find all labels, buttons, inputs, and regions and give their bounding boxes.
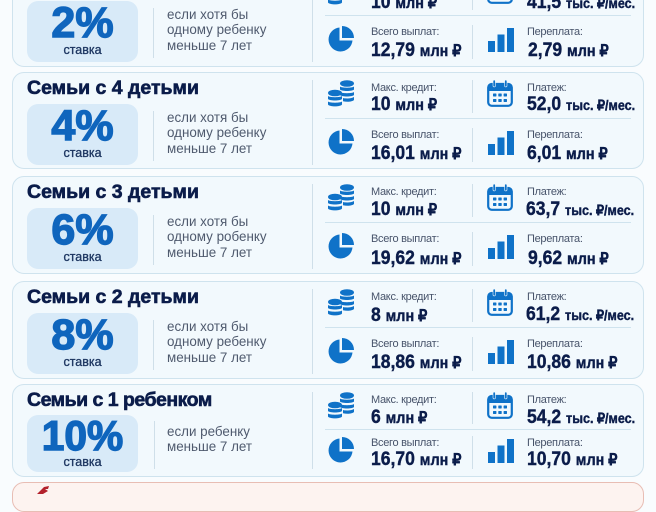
condition text: меньше 7 лет [167,245,252,260]
icon: pie chart [328,437,354,463]
icon: pie chart [328,233,354,258]
icon: pie chart [328,129,354,154]
condition text [167,110,266,156]
condition text: меньше 7 лет [167,141,252,156]
condition text [167,7,266,53]
icon: bar chart [488,131,514,155]
payment label: Платеж: [527,394,566,406]
payment label: Платеж: [527,82,566,94]
icon: pie chart [328,26,354,52]
icon: calendar [487,80,513,107]
rate badge 4%: ставка [63,146,102,160]
panel: families with 3 children, 6% [12,176,644,274]
payment label: Платеж: [527,186,566,198]
total payments value: 12,79 млн ₽ [371,39,461,61]
overpayment value: 2,79 млн ₽ [528,39,609,61]
rate badge 2%: 2% [51,0,114,47]
icon: calendar [487,289,513,316]
total payments label: Всего выплат: [371,233,439,245]
total payments label: Всего выплат: [371,26,439,38]
overpayment value: 10,70 млн ₽ [527,448,617,470]
icon: red mark [36,486,50,494]
icon: calendar [487,184,513,211]
payment value: 63,7 тыс. ₽/мес. [526,198,634,220]
condition text: меньше 7 лет [167,439,252,454]
max credit label: Макс. кредит: [371,291,437,303]
panel: families with 1 child, 10% [12,384,644,477]
icon: coins [328,184,354,210]
icon: bar chart [488,28,514,52]
overpayment label: Переплата: [527,26,583,38]
condition text: меньше 7 лет [167,350,252,365]
payment value: 52,0 тыс. ₽/мес. [527,93,635,115]
condition text: одному ребенку [167,22,266,37]
max credit value: 10 млн ₽ [371,93,437,115]
overpayment value: 10,86 млн ₽ [527,351,617,373]
payment value: 61,2 тыс. ₽/мес. [526,303,634,325]
max credit label: Макс. кредит: [371,394,437,406]
condition text: одному робенку [167,229,267,244]
condition text [167,214,267,260]
condition text: одному ребенку [167,334,266,349]
overpayment label: Переплата: [527,338,583,350]
rate badge 8%: ставка [63,355,102,369]
icon: coins [328,0,342,4]
icon: pie chart [328,338,354,364]
total payments value: 16,01 млн ₽ [371,142,461,164]
rate badge 10%: 10% [42,412,123,459]
condition text: если хотя бы [167,214,248,229]
max credit label: Макс. кредит: [371,186,437,198]
panel: families with 2 children, 8% [12,281,644,379]
rate badge 4%: 4% [51,102,114,150]
payment value: 54,2 тыс. ₽/мес. [527,406,635,428]
icon: bar chart [488,340,514,364]
icon: coins [328,392,354,418]
max credit value: 8 млн ₽ [371,304,427,326]
rate badge 6%: ставка [63,250,102,264]
condition text: если хотя бы [167,7,248,22]
rate badge 10% [27,415,138,472]
icon: coins [328,80,354,106]
condition text [167,319,266,365]
condition text: если хотя бы [167,110,248,125]
rate badge 8%: 8% [51,311,114,359]
total payments value: 19,62 млн ₽ [371,247,461,269]
condition text: меньше 7 лет [167,38,252,53]
max credit value: 10 млн ₽ [371,198,437,220]
panel: families with 5 children, 2% [12,0,644,67]
heading: Семьи с 4 детьми [27,77,199,99]
total payments label: Всего выплат: [371,338,439,350]
rate badge 2% [27,1,138,62]
icon: calendar [487,0,513,4]
heading: Семьи с 3 детьми [27,181,199,203]
heading: Семьи с 1 ребенком [27,389,212,411]
condition text: если ребенку [167,424,250,439]
total payments value: 16,70 млн ₽ [371,448,461,470]
condition text [167,424,252,454]
overpayment label: Переплата: [527,437,583,449]
panel: families with 4 children, 4% [12,72,644,169]
rate badge 4% [27,104,138,165]
payment label: Платеж: [527,291,566,303]
total payments label: Всего выплат: [371,437,439,449]
rate badge 6% [27,208,138,269]
max credit value: 6 млн ₽ [371,406,427,428]
overpayment value: 6,01 млн ₽ [527,142,608,164]
max credit label: Макс. кредит: [371,82,437,94]
icon: coins [328,289,354,316]
rate badge 6%: 6% [51,206,114,254]
icon: bar chart [488,439,514,463]
icon: bar chart [488,235,514,259]
overpayment label: Переплата: [527,129,583,141]
rate badge 8% [27,313,138,374]
panel: red warning (cropped) [12,482,644,512]
condition text: если хотя бы [167,319,248,334]
icon: calendar [487,392,513,419]
rate badge 10%: ставка [63,455,102,469]
condition text: одному ребенку [167,125,266,140]
total payments label: Всего выплат: [371,129,439,141]
overpayment value: 9,62 млн ₽ [528,247,609,269]
total payments value: 18,86 млн ₽ [371,351,461,373]
overpayment label: Переплата: [527,233,583,245]
rate badge 2%: ставка [63,43,102,57]
heading: Семьи с 2 детьми [27,286,199,308]
